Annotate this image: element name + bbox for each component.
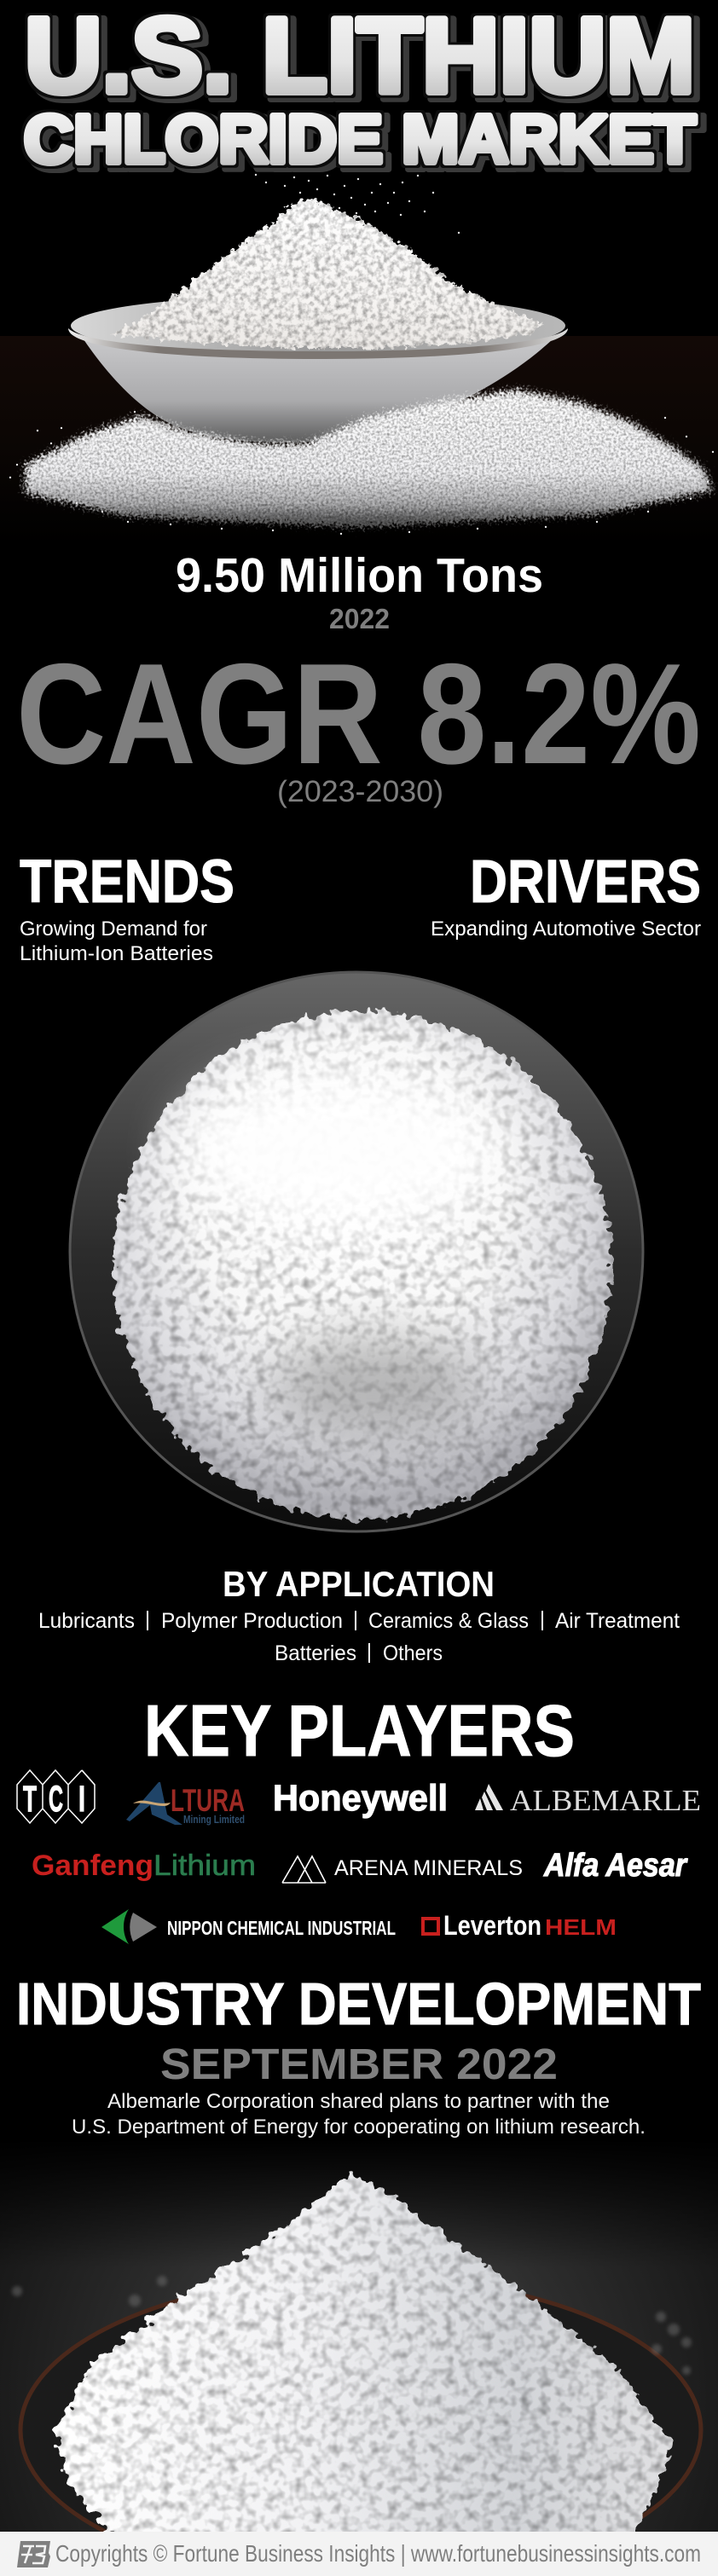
logo: Honeywell: Honeywell	[273, 1778, 448, 1819]
title line 1: U.S. LITHIUM	[25, 0, 695, 115]
logo: Ganfeng Lithium: Lithium	[153, 1850, 256, 1882]
lower image: salt pile in brown bowl	[0, 2139, 718, 2576]
bowl inner and rim	[68, 295, 568, 359]
logo: Leverton Helm: HELM	[545, 1914, 617, 1940]
title	[24, 0, 696, 177]
application list row 1: Ceramics & Glass	[368, 1609, 529, 1633]
industry development block	[16, 1971, 701, 2139]
bokeh specks	[12, 2276, 692, 2375]
logo: Nippon Chemical Industrial: NIPPON CHEMICAL INDUSTRIAL	[167, 1917, 396, 1939]
bowl body	[84, 339, 553, 443]
lower shadow	[273, 1334, 478, 1437]
logo: TCI: C	[49, 1779, 63, 1820]
logo: TCI: T	[23, 1779, 37, 1820]
logo: TCI	[17, 1770, 95, 1823]
logo: Albemarle: ALBEMARLE	[510, 1784, 701, 1817]
market size year: 2022	[329, 603, 390, 634]
footer	[0, 2532, 718, 2576]
application list row 1: Polymer Production	[161, 1609, 343, 1633]
icon: Fortune Business Insights logo	[17, 2541, 50, 2567]
development text: Albemarle Corporation shared plans to partner with the	[107, 2090, 610, 2113]
dark glow background	[0, 2140, 718, 2533]
logo: Arena Minerals: ARENA MINERALS	[334, 1856, 523, 1880]
drivers text: Expanding Automotive Sector	[431, 918, 701, 941]
hero image: salt bowl	[0, 171, 718, 546]
by application block	[38, 1564, 680, 1665]
logo: Nippon Chemical Industrial	[101, 1909, 396, 1944]
logo: Altura Mining: Mining Limited	[183, 1813, 245, 1826]
trends block: Lithium-Ion Batteries	[20, 942, 213, 965]
application list row 1	[38, 1609, 680, 1633]
bowl	[20, 2277, 701, 2576]
application list row 1: Air Treatment	[555, 1609, 680, 1633]
logo: Ganfeng Lithium: Ganfeng	[32, 1850, 153, 1882]
wooden table	[0, 336, 718, 546]
trends block	[20, 848, 235, 965]
application list row 2: Others	[383, 1641, 443, 1665]
footer background	[0, 2532, 718, 2576]
logo: Ganfeng Lithium	[32, 1850, 256, 1882]
bright highlight	[179, 1070, 503, 1232]
logo: Altura Mining: LTURA	[171, 1783, 245, 1818]
CAGR period: (2023-2030)	[277, 775, 443, 808]
title line 2: CHLORIDE MARKET	[24, 101, 696, 177]
trends text: Growing Demand for	[20, 918, 207, 941]
logo: TCI: I	[78, 1779, 85, 1820]
salt heap on table	[26, 390, 712, 525]
granule pile	[113, 1011, 611, 1520]
logo: Leverton Helm	[423, 1910, 617, 1941]
key players logos	[17, 1770, 701, 1944]
key players heading: KEY PLAYERS	[144, 1691, 575, 1772]
market size value: 9.50 Million Tons	[176, 548, 543, 603]
falling grains and scatter	[10, 171, 713, 534]
logo: Alfa Aesar: Alfa Aesar	[543, 1848, 688, 1884]
dish	[70, 972, 643, 1531]
top-down dish of lithium chloride	[70, 972, 643, 1531]
application list row 2	[275, 1641, 443, 1665]
industry development block: U.S. Department of Energy for cooperating on lithium research.	[72, 2116, 646, 2139]
granule pile	[55, 2173, 673, 2550]
drivers block	[431, 848, 701, 941]
logo: Altura Mining	[126, 1782, 245, 1826]
by application heading: BY APPLICATION	[223, 1564, 495, 1604]
development date: SEPTEMBER 2022	[160, 2040, 558, 2088]
application list row 1: Lubricants	[38, 1609, 135, 1633]
salt pile in bowl	[110, 199, 545, 348]
logo: Leverton Helm: Leverton	[443, 1910, 541, 1941]
top fade to black	[0, 2139, 718, 2267]
trends heading: TRENDS	[20, 848, 235, 916]
application list row 2: Batteries	[275, 1641, 356, 1665]
